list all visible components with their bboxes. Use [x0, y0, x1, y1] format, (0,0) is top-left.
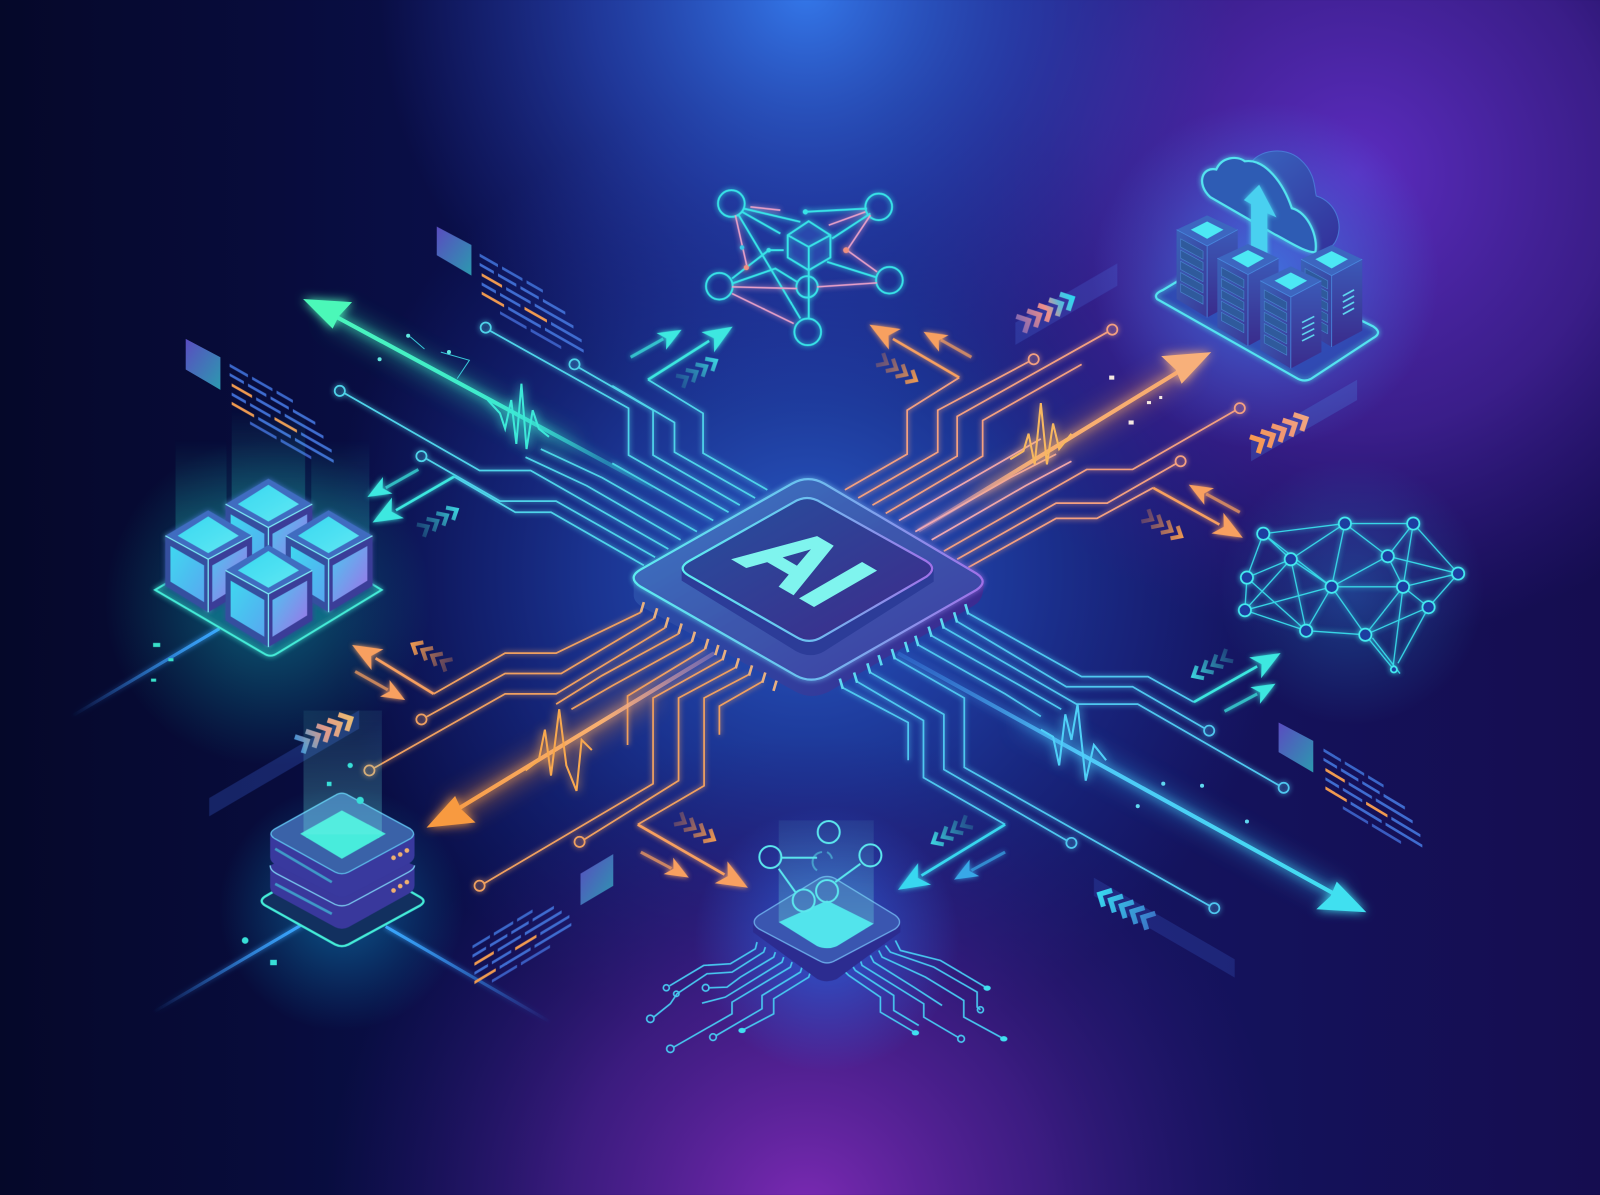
big arrow: orange north-east	[918, 352, 1211, 531]
central AI chip	[634, 479, 984, 696]
traces: north-west	[335, 322, 767, 565]
data block: west	[186, 339, 334, 471]
cubes	[165, 479, 372, 647]
big arrow: orange south-west	[427, 653, 714, 828]
platform	[1156, 253, 1378, 380]
chip body	[634, 490, 984, 696]
node: server stack	[242, 710, 424, 965]
chip traces	[647, 940, 1004, 1052]
traces: south-west	[364, 612, 762, 891]
chip pins	[641, 602, 968, 691]
chip top plate	[634, 479, 983, 680]
node: neural brain	[1239, 517, 1464, 674]
chip inner side	[682, 568, 934, 655]
chip label: AI	[713, 512, 900, 620]
chip body	[753, 922, 900, 981]
server racks	[1177, 215, 1321, 368]
platform	[155, 522, 382, 656]
network above	[759, 821, 881, 911]
node: data cubes	[151, 408, 382, 682]
back server	[1301, 245, 1362, 347]
platform	[262, 852, 424, 946]
big arrow: green north-west	[303, 299, 653, 488]
chip core	[779, 900, 874, 948]
big arrow: blue south-east	[898, 653, 1366, 912]
small arrows	[346, 314, 1287, 901]
light beam	[303, 710, 382, 834]
data block: north-west	[437, 227, 584, 360]
node: neural hub with cube	[706, 190, 903, 345]
node: lower chip	[647, 820, 1007, 1052]
data block: south-east	[1279, 722, 1422, 855]
light rays	[71, 629, 551, 1022]
traces: north-east	[845, 325, 1245, 567]
light beams	[176, 408, 369, 551]
cloud	[1202, 151, 1339, 253]
node: cloud and servers	[1156, 151, 1378, 380]
data block: south	[472, 854, 613, 993]
traces: south-east	[843, 613, 1289, 913]
upper layer	[270, 793, 415, 897]
chip inner plate	[683, 498, 932, 641]
upload arrow	[1244, 185, 1277, 263]
light beam	[779, 820, 874, 924]
chevron markers	[209, 263, 1357, 978]
particles	[242, 763, 364, 965]
lower layer	[270, 834, 415, 929]
